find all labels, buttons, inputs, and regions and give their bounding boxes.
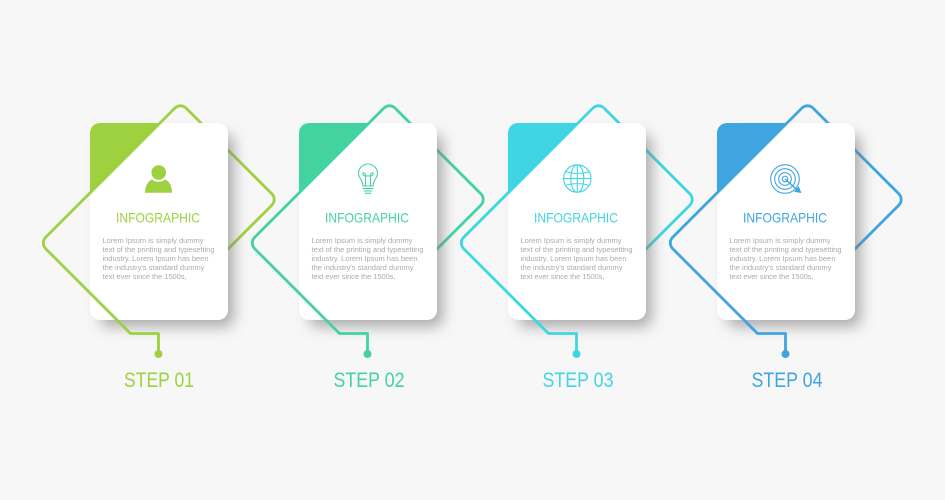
icon: light bulb [358, 164, 378, 193]
connector dot [782, 350, 790, 358]
card corner triangle [90, 123, 160, 193]
panel: step 04 [670, 106, 901, 392]
text block [312, 236, 424, 281]
card [508, 123, 646, 320]
text block: industry. Lorem Ipsum has been [102, 254, 208, 263]
heading: INFOGRAPHIC [743, 210, 827, 226]
card corner triangle [717, 123, 787, 193]
card shadow [100, 134, 234, 327]
text block: Lorem Ipsum is simply dummy [520, 236, 622, 245]
text block [520, 236, 632, 281]
text block: text of the printing and typesetting [520, 245, 632, 254]
text block: the industry's standard dummy [102, 263, 205, 272]
diamond outline front with connector [670, 106, 813, 354]
card corner triangle [299, 123, 369, 193]
text block: industry. Lorem Ipsum has been [520, 254, 626, 263]
card [90, 123, 228, 320]
text block: Lorem Ipsum is simply dummy [312, 236, 413, 245]
text block: Lorem Ipsum is simply dummy [730, 236, 831, 245]
card corner triangle [508, 123, 578, 193]
panel: step 02 [252, 106, 483, 392]
icon: target [771, 165, 800, 193]
text block [730, 236, 842, 281]
text block: the industry's standard dummy [730, 263, 832, 272]
heading: INFOGRAPHIC [534, 210, 618, 226]
text block: the industry's standard dummy [312, 263, 414, 272]
diamond outline front with connector [461, 106, 604, 354]
diamond outline front with connector [252, 106, 395, 354]
card [299, 123, 437, 320]
text block [102, 236, 214, 281]
step label: STEP 03 [542, 369, 614, 392]
diamond outline back [186, 108, 274, 277]
text block: text ever since the 1500s, [102, 272, 186, 281]
text block: text of the printing and typesetting [730, 245, 842, 254]
connector dot [572, 350, 580, 358]
text block: text ever since the 1500s, [312, 272, 396, 281]
text block: Lorem Ipsum is simply dummy [102, 236, 204, 245]
step label: STEP 02 [334, 369, 404, 392]
connector dot [154, 350, 162, 358]
text block: text of the printing and typesetting [312, 245, 424, 254]
heading: INFOGRAPHIC [325, 210, 409, 226]
text block: text ever since the 1500s, [730, 272, 814, 281]
text block: industry. Lorem Ipsum has been [312, 254, 418, 263]
card shadow [309, 134, 443, 327]
icon: globe [564, 165, 591, 192]
panel: step 03 [461, 106, 692, 392]
diamond outline front with connector [43, 106, 186, 354]
infographic [42, 104, 903, 387]
card shadow [727, 134, 861, 327]
text block: industry. Lorem Ipsum has been [730, 254, 836, 263]
text block: text ever since the 1500s, [520, 272, 604, 281]
heading: INFOGRAPHIC [116, 210, 200, 226]
step label: STEP 01 [124, 369, 194, 392]
step label: STEP 04 [752, 369, 823, 392]
connector dot [364, 350, 372, 358]
card [717, 123, 855, 320]
card shadow [518, 134, 652, 327]
text block: text of the printing and typesetting [102, 245, 214, 254]
diamond outline back [604, 108, 692, 277]
diamond outline back [395, 108, 483, 277]
diamond outline back [813, 108, 901, 277]
icon: person [145, 165, 172, 193]
text block: the industry's standard dummy [520, 263, 623, 272]
panel: step 01 [43, 106, 274, 392]
